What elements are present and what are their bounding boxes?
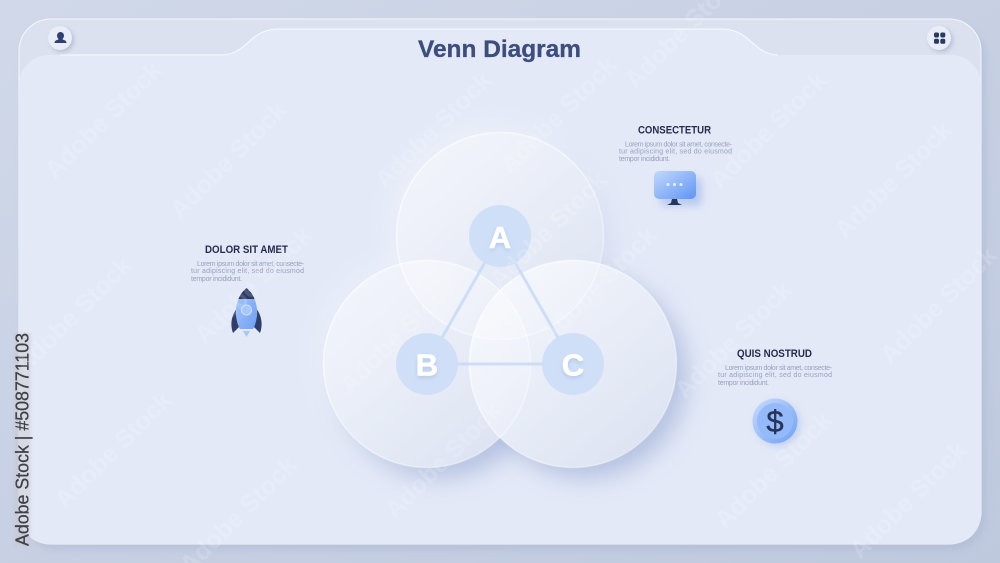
- text block: consectetur: [619, 124, 733, 163]
- text block: consectetur: tur adipiscing elit, sed do eiusmod: [619, 148, 732, 156]
- watermarks: faint repeated stock text: Adobe Stock: [704, 66, 832, 194]
- node A: A: [489, 220, 511, 255]
- text block: dolor sit amet: Lorem ipsum dolor sit amet, consecte-: [197, 261, 305, 268]
- watermarks: faint repeated stock text: Adobe Stock: [534, 221, 662, 349]
- watermarks: faint repeated stock text: Adobe Stock: [49, 386, 177, 514]
- node B: [396, 333, 458, 395]
- text block: quis nostrud: tempor incididunt.: [718, 380, 769, 387]
- watermarks: faint repeated stock text: Adobe Stock: [379, 396, 507, 524]
- icon: dollar coin: $: [766, 404, 784, 439]
- watermarks: faint repeated stock text: Adobe Stock: [334, 271, 462, 399]
- text block: consectetur: Lorem ipsum dolor sit amet, consecte-: [625, 142, 733, 148]
- node C: C: [562, 348, 584, 382]
- node C: [542, 333, 604, 395]
- watermarks: faint repeated stock text: Adobe Stock: [369, 66, 497, 194]
- glass circle C: [470, 260, 676, 468]
- opaque base under glass: [324, 132, 676, 468]
- icon: grid menu button: [927, 26, 953, 52]
- node A: [469, 205, 531, 267]
- node B: B: [416, 350, 438, 385]
- watermarks: faint repeated stock text: Adobe Stock: [709, 406, 837, 534]
- watermarks: faint repeated stock text: Adobe Stock: [484, 166, 612, 294]
- text block: dolor sit amet: tempor incididunt.: [191, 276, 242, 283]
- watermarks: faint repeated stock text: Adobe Stock: [39, 56, 167, 184]
- text block: consectetur: CONSECTETUR: [638, 124, 711, 136]
- connectors between nodes: [427, 236, 573, 364]
- watermarks: faint repeated stock text: Adobe Stock: [9, 251, 137, 379]
- title: Venn Diagram: [418, 36, 581, 63]
- watermarks: faint repeated stock text: Adobe Stock: [829, 116, 957, 244]
- text block: dolor sit amet: tur adipiscing elit, sed do eiusmod: [191, 268, 304, 275]
- watermarks: faint repeated stock text: Adobe Stock: [669, 276, 797, 404]
- glass circle B: [324, 260, 530, 468]
- watermarks: faint repeated stock text: Adobe Stock: [189, 221, 317, 349]
- icon: rocket: [231, 288, 262, 337]
- circle shadows: [315, 124, 687, 478]
- watermarks: faint repeated stock text: Adobe Stock: [874, 241, 1000, 369]
- icon: user button: [48, 26, 74, 52]
- text block: dolor sit amet: [191, 244, 305, 283]
- text block: quis nostrud: Lorem ipsum dolor sit amet, consecte-: [725, 365, 833, 372]
- icon: dollar coin: [752, 398, 800, 446]
- node A: A: [489, 222, 511, 257]
- glass circle A: [396, 132, 604, 340]
- text block: dolor sit amet: DOLOR SIT AMET: [205, 244, 288, 256]
- text block: quis nostrud: [718, 348, 833, 387]
- node B: B: [416, 348, 438, 382]
- icon: chat monitor: [654, 171, 702, 206]
- chart: Venn diagram: [315, 124, 687, 478]
- node C: C: [562, 350, 584, 385]
- watermarks: faint repeated stock text: Adobe Stock: [494, 51, 622, 179]
- watermarks: faint repeated stock text: Adobe Stock: [164, 96, 292, 224]
- watermarks: faint repeated stock text: Adobe Stock: [844, 436, 972, 563]
- stock id label: Adobe Stock | #508771103: [12, 333, 32, 546]
- text block: quis nostrud: QUIS NOSTRUD: [737, 348, 812, 360]
- text block: quis nostrud: tur adipiscing elit, sed do eiusmod: [718, 372, 832, 379]
- text block: consectetur: tempor incididunt.: [619, 156, 670, 163]
